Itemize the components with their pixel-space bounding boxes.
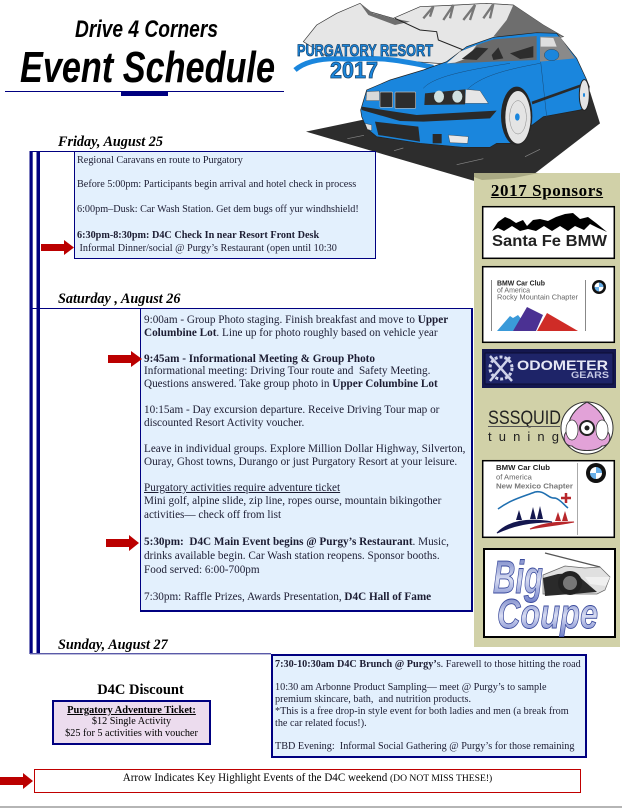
text: main event: 5:30pm: D4C Main Event begins @ Purgy’s Restaurant. Music, [144, 536, 449, 548]
text: car wash: 6:00pm–Dusk: Car Wash Station. Get dem bugs off yur windhshield! [77, 204, 359, 214]
text: focus: the car related focus!). [275, 718, 367, 729]
logo: BMW CCA Rocky Mountain Chapter: Rocky Mountain Chapter [497, 294, 579, 302]
text: line up: Columbine Lot. Line up for photo roughly based on vehicle year [144, 326, 438, 338]
illustration: blue BMW with mountains [293, 3, 600, 181]
text: activities list: Mini golf, alpine slide, zip line, ropes ourse, mountain bikingother [144, 495, 441, 507]
text: caravans: Regional Caravans en route to Purgatory [77, 155, 243, 166]
text: ticket heading: Purgatory Adventure Ticket: [67, 705, 196, 716]
panel: Sunday schedule [271, 654, 587, 758]
logo: SSSQUID tuning: SSSQUID [488, 408, 561, 429]
illustration: blue BMW with mountains: 2017 [330, 57, 378, 83]
heading: Friday: Friday, August 25 [58, 134, 163, 150]
logo: Big Coupe: Big [493, 551, 543, 603]
legend: arrow explanation: Arrow Indicates Key Highlight Events of the D4C weekend (DO NOT MISS THESE!) [123, 772, 492, 784]
text: food: Food served: 6:00-700pm [144, 564, 260, 576]
heading: Saturday: Saturday , August 26 [58, 291, 180, 307]
logo: SSSQUID tuning [488, 401, 614, 454]
arrow: Friday highlight [41, 240, 74, 255]
text: meeting details: Informational meeting: Driving Tour route and Safety Meeting. [144, 364, 430, 376]
logo: Odometer Gears: GEARS [571, 370, 609, 380]
legend: arrow explanation [34, 769, 581, 793]
text: brunch: 7:30-10:30am D4C Brunch @ Purgy’s. Farewell to those hitting the road [275, 658, 581, 670]
logo: BMW CCA Rocky Mountain Chapter: of America [497, 288, 530, 294]
text: single price: $12 Single Activity [92, 716, 171, 727]
arrow: meeting highlight [108, 351, 142, 367]
frame: schedule timeline rails [30, 151, 271, 654]
arrow: legend [0, 773, 33, 789]
logo: Santa Fe BMW [482, 206, 616, 260]
arrow: main event highlight [106, 535, 139, 551]
text: towns: Ouray, Ghost towns, Durango or just Purgatory Resort at your leisure. [144, 456, 457, 468]
panel: Saturday schedule [140, 308, 473, 612]
logo: BMW CCA New Mexico Chapter: New Mexico Chapter [496, 482, 573, 490]
text: meeting heading: 9:45am - Informational Meeting & Group Photo [144, 352, 375, 364]
logo: BMW CCA New Mexico Chapter: of America [496, 472, 533, 482]
text: photo staging: 9:00am - Group Photo staging. Finish breakfast and move to Upper [144, 314, 448, 326]
logo: BMW CCA New Mexico Chapter: BMW Car Club [496, 463, 550, 472]
heading: sponsors: 2017 Sponsors [491, 181, 603, 200]
logo: Odometer Gears [482, 349, 616, 388]
title: Drive 4 Corners Event Schedule: Event Schedule [20, 43, 275, 92]
logo: BMW CCA Rocky Mountain Chapter: BMW Car Club [497, 280, 545, 288]
text: check in: 6:30pm-8:30pm: D4C Check In near Resort Front Desk [77, 230, 319, 240]
text: evening: TBD Evening: Informal Social Gathering @ Purgy’s for those remaining [275, 741, 574, 752]
panel: sponsors [474, 173, 620, 647]
logo: SSSQUID tuning: tuning [488, 429, 559, 444]
logo: Odometer Gears: ODOMETER [517, 357, 608, 373]
text: questions: Questions answered. Take group photo in Upper Columbine Lot [144, 378, 438, 390]
heading: Sunday: Sunday, August 27 [58, 637, 168, 653]
title: Drive 4 Corners Event Schedule [5, 16, 284, 96]
logo: Santa Fe BMW: Santa Fe BMW [492, 233, 608, 250]
text: excursion: 10:15am - Day excursion departure. Receive Driving Tour map or [144, 404, 439, 416]
text: raffle: 7:30pm: Raffle Prizes, Awards Presentation, D4C Hall of Fame [144, 591, 431, 603]
text: check off: activities— check off from list [144, 509, 281, 521]
text: bundle price: $25 for 5 activities with voucher [65, 728, 198, 739]
text: sampling: 10:30 am Arbonne Product Sampling— meet @ Purgy’s to sample [275, 682, 546, 693]
shadow: road over sponsors [474, 173, 538, 180]
text: skincare: premium skincare, bath, and nutrition products. [275, 694, 471, 705]
title: Drive 4 Corners Event Schedule: Drive 4 Corners [75, 16, 218, 43]
text: arrival: Before 5:00pm: Participants begin arrival and hotel check in process [77, 178, 356, 190]
illustration: blue BMW with mountains: PURGATORY RESORT [297, 41, 433, 60]
logo: Big Coupe [483, 548, 616, 638]
heading: D4C Discount: D4C Discount [97, 682, 184, 698]
text: activities heading: Purgatory activities require adventure ticket [144, 482, 340, 494]
text: dinner: Informal Dinner/social @ Purgy’s Restaurant (open until 10:30 [80, 242, 337, 254]
panel: discount ticket [52, 700, 211, 745]
text: voucher: discounted Resort Activity voucher. [144, 416, 304, 428]
logo: BMW CCA New Mexico Chapter [482, 460, 616, 538]
text: drinks: drinks available begin. Car Wash station reopens. Sponsor booths. [144, 550, 440, 562]
text: drop-in note: *This is a free drop-in style event for both ladies and men (a break from [275, 706, 569, 717]
panel: Friday schedule [74, 151, 376, 259]
logo: BMW CCA Rocky Mountain Chapter [482, 266, 616, 344]
text: groups: Leave in individual groups. Explore Million Dollar Highway, Silverton, [144, 442, 465, 454]
